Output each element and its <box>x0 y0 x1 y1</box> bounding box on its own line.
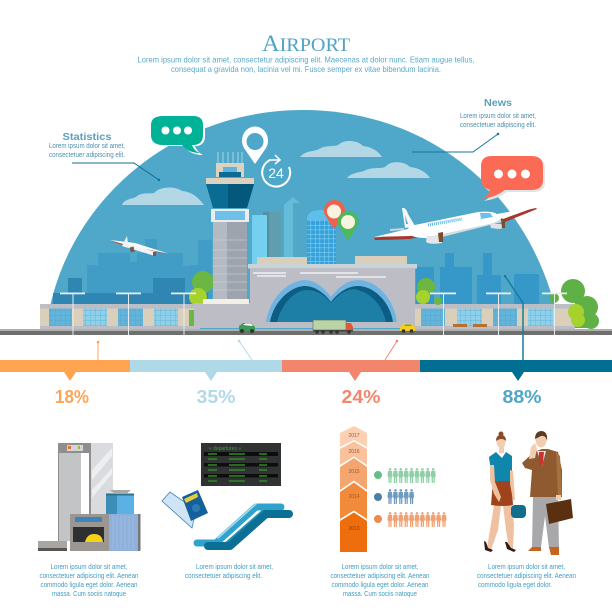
timeline arrows: 2013 <box>348 526 360 532</box>
caption: security <box>40 562 138 598</box>
icon: 24 hours: 24 <box>268 165 284 181</box>
icon: red pin <box>324 200 345 229</box>
woman <box>484 432 526 552</box>
icon: 24 hours <box>262 155 290 187</box>
sky dome <box>46 110 560 329</box>
callout: news: consectetuer adipiscing elit. <box>460 122 536 129</box>
timeline arrows: 2016 <box>348 449 360 455</box>
percentages: 24% <box>342 387 380 407</box>
intro text <box>138 54 474 74</box>
street lights <box>60 292 567 335</box>
caption: departures: consectetuer adipiscing elit. <box>185 571 262 580</box>
caption: security: consectetuer adipiscing elit. Aenean <box>40 571 138 580</box>
speech bubble: red <box>481 156 545 201</box>
icon: white location pin <box>242 127 268 164</box>
timeline arrows <box>340 426 367 552</box>
percentages <box>55 387 542 407</box>
man <box>522 431 573 555</box>
caption: security: massa. Cum sociis natoque <box>52 589 126 598</box>
timeline arrows: 2014 <box>348 494 360 500</box>
caption: timeline: commodo ligula eget dolor. Aenean <box>332 580 428 589</box>
departures board: « departures » <box>209 446 241 452</box>
control tower <box>203 152 254 304</box>
caption: timeline: Lorem ipsum dolor sit amet, <box>342 562 418 571</box>
terminal left wing <box>40 304 200 330</box>
skyline right <box>416 253 539 305</box>
callout: news: Lorem ipsum dolor sit amet, <box>460 113 536 120</box>
callout: news: News <box>484 98 512 109</box>
vehicle: green car <box>239 323 255 333</box>
clouds <box>122 141 430 205</box>
departures board <box>201 443 281 486</box>
speech bubble: green <box>151 116 205 155</box>
caption: people <box>477 562 576 589</box>
trees <box>189 271 599 329</box>
intro text: Lorem ipsum dolor sit amet, consectetur adipiscing elit. Maecenas at dolor nunc. Etiam augue tellus, <box>138 54 474 64</box>
caption: departures <box>185 562 273 580</box>
passport and ticket <box>162 490 208 528</box>
intro text: consequat a gravida non, lacinia vel mi. Fusce semper ex vitae bibendum lacinia. <box>171 64 441 74</box>
vehicle: yellow car <box>400 324 415 333</box>
vehicle: truck <box>313 320 353 334</box>
caption: people: commodo ligula eget dolor. <box>478 580 552 589</box>
large airplane <box>374 207 537 244</box>
timeline arrows: 2015 <box>348 469 360 475</box>
caption: departures: Lorem ipsum dolor sit amet, <box>196 562 273 571</box>
caption: people: consectetuer adipiscing elit. Aenean <box>477 571 576 580</box>
percentages: 18% <box>55 387 89 407</box>
central terminal building <box>194 256 417 328</box>
terminal right wing <box>415 304 575 330</box>
city buildings <box>252 197 336 265</box>
progress bar <box>0 360 612 381</box>
pointer lines <box>97 275 523 360</box>
caption: people: Lorem ipsum dolor sit amet, <box>488 562 565 571</box>
percentages: 35% <box>196 387 236 407</box>
skyline left <box>53 239 212 305</box>
small airplane <box>110 236 168 256</box>
timeline arrows: 2017 <box>348 433 360 439</box>
caption: security: Lorem ipsum dolor sit amet, <box>50 562 128 571</box>
callout: statistics: Statistics <box>62 132 112 143</box>
caption: security: commodo ligula eget dolor. Aenean <box>40 580 138 589</box>
title: AIRPORT <box>262 31 350 56</box>
security scanner illustration <box>38 443 140 551</box>
road <box>0 329 612 335</box>
panel: airport scene <box>0 110 612 335</box>
callout: news <box>412 98 536 152</box>
callout: statistics <box>49 132 160 181</box>
callout: statistics: Lorem ipsum dolor sit amet, <box>49 143 125 150</box>
callout: statistics: consectetuer adipiscing elit. <box>49 152 125 159</box>
caption: timeline <box>330 562 430 598</box>
icon: green pin <box>338 211 358 241</box>
caption: timeline: massa. Cum sociis natoque <box>343 589 417 598</box>
escalator <box>197 504 289 546</box>
percentages: 88% <box>502 387 542 407</box>
pictogram chart <box>374 468 447 527</box>
caption: timeline: consectetuer adipiscing elit. Aenean <box>330 571 430 580</box>
